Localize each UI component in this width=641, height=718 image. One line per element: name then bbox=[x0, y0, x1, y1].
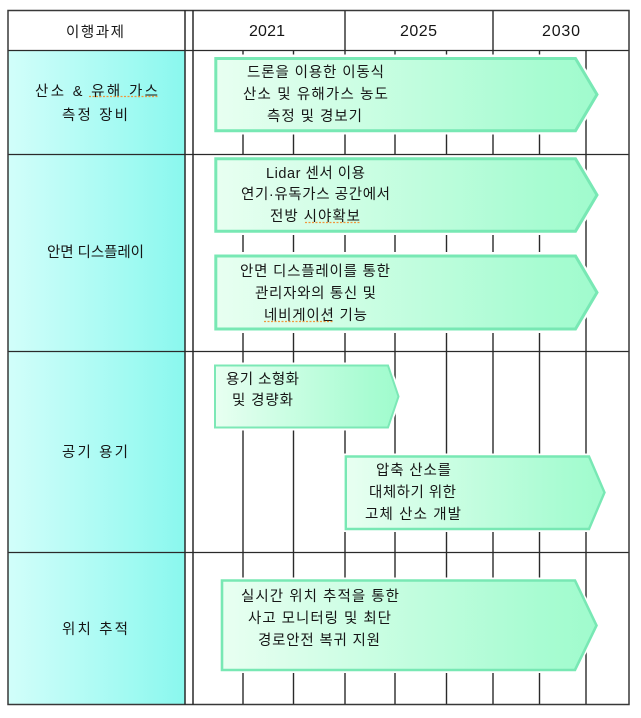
arrow: lidar sensor bar: 연기·유독가스 공간에서 bbox=[241, 186, 390, 203]
arrow: real-time location tracking bar: 경로안전 복귀 지원 bbox=[258, 632, 380, 649]
arrow: face display communication bar: 관리자와의 통신 및 bbox=[255, 285, 376, 302]
year label 2025: 2025 bbox=[400, 23, 437, 40]
arrow: drone gas sensor bar: 산소 및 유해가스 농도 bbox=[243, 86, 388, 103]
row label: gas measurement equipment: 측정 장비 bbox=[62, 107, 128, 124]
year label 2030: 2030 bbox=[542, 23, 580, 40]
arrow: face display communication bar: 안면 디스플레이를 통한 bbox=[240, 263, 390, 280]
arrow: lidar sensor bar bbox=[215, 158, 598, 232]
arrow: face display communication bar: 네비게이션 기능 bbox=[264, 307, 367, 324]
arrow: solid oxygen development bar: 압축 산소를 bbox=[376, 462, 451, 479]
arrow: lidar sensor bar: 전방 시야확보 bbox=[270, 208, 360, 225]
arrow: drone gas sensor bar: 측정 및 경보기 bbox=[267, 108, 362, 125]
row label: gas measurement equipment bbox=[35, 83, 158, 124]
arrow: face display communication bar bbox=[215, 255, 598, 330]
arrow: solid oxygen development bar bbox=[346, 456, 605, 530]
year label 2021: 2021 bbox=[249, 23, 285, 40]
row label: location tracking: 위치 추적 bbox=[62, 621, 128, 638]
arrow: real-time location tracking bar bbox=[222, 580, 597, 670]
panel: left column cyan cells bbox=[8, 51, 185, 704]
arrow: container miniaturization bar: 용기 소형화 bbox=[226, 371, 299, 388]
arrow: solid oxygen development bar: 대체하기 위한 bbox=[369, 484, 456, 501]
arrow: container miniaturization bar bbox=[214, 365, 399, 428]
arrow: container miniaturization bar: 및 경량화 bbox=[232, 392, 293, 409]
arrow: drone gas sensor bar bbox=[215, 58, 598, 132]
heading: task column: 이행과제 bbox=[66, 24, 124, 41]
arrow: lidar sensor bar: Lidar 센서 이용 bbox=[266, 165, 365, 182]
arrow: real-time location tracking bar: 사고 모니터링 및 최단 bbox=[248, 610, 391, 627]
arrow: drone gas sensor bar: 드론을 이용한 이동식 bbox=[247, 64, 384, 81]
row label: face display: 안면 디스플레이 bbox=[47, 244, 144, 261]
arrow: real-time location tracking bar: 실시간 위치 추적을 통한 bbox=[241, 588, 399, 605]
arrow: solid oxygen development bar: 고체 산소 개발 bbox=[365, 506, 461, 523]
row label: air container: 공기 용기 bbox=[62, 444, 128, 461]
row label: gas measurement equipment: 산소 & 유해 가스 bbox=[35, 83, 158, 100]
